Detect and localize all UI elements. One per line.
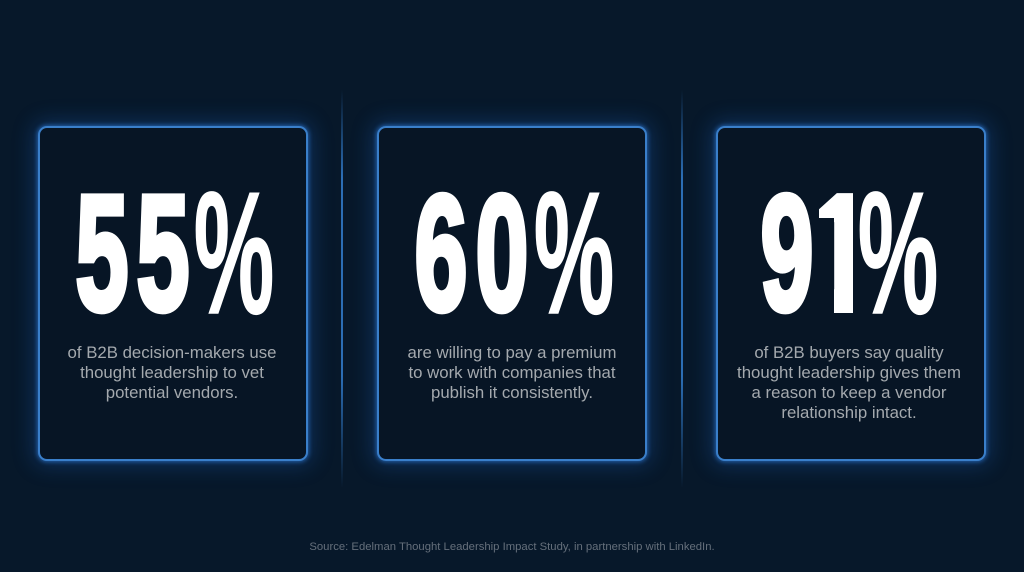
stat: 55%: 5 — [76, 163, 128, 345]
text: 91% description: relationship intact. — [781, 403, 917, 422]
panel: 60% card — [377, 126, 647, 461]
text: 91% description: thought leadership gives them — [737, 363, 961, 382]
text: 91% description: a reason to keep a vendor — [752, 383, 946, 402]
text: 55% description: potential vendors. — [106, 383, 238, 402]
divider: right — [681, 90, 683, 488]
text: 55% description — [68, 343, 276, 402]
stat: 55%: 5 — [137, 163, 189, 345]
text: 60% description: are willing to pay a premium — [408, 343, 616, 362]
divider: left — [341, 90, 343, 488]
text: 60% description — [408, 343, 616, 402]
stat: 91%: 1 — [809, 163, 875, 345]
stat: 55% — [76, 156, 274, 351]
panel: 91% card — [716, 126, 986, 461]
stat: 55%: % — [194, 156, 274, 351]
stat: 60% — [415, 156, 614, 351]
text: 60% description: to work with companies that — [408, 363, 616, 382]
text: 55% description: thought leadership to vet — [80, 363, 264, 382]
stat: 91%: 9 — [761, 163, 813, 345]
stat: 91%: % — [858, 156, 938, 351]
stat: 60%: 6 — [415, 163, 467, 345]
big statistics — [76, 191, 936, 316]
source note: Source: Edelman Thought Leadership Impact Study, in partnership with LinkedIn. — [309, 541, 715, 553]
text: 60% description: publish it consistently. — [431, 383, 593, 402]
stat: 60%: % — [534, 156, 614, 351]
text: 55% description: of B2B decision-makers use — [68, 343, 276, 362]
text: 91% description — [737, 343, 961, 422]
text: 91% description: of B2B buyers say quality — [754, 343, 944, 362]
stat: 91% — [762, 191, 936, 316]
panel: 55% card — [38, 126, 308, 461]
stat: 60%: 0 — [476, 163, 528, 345]
